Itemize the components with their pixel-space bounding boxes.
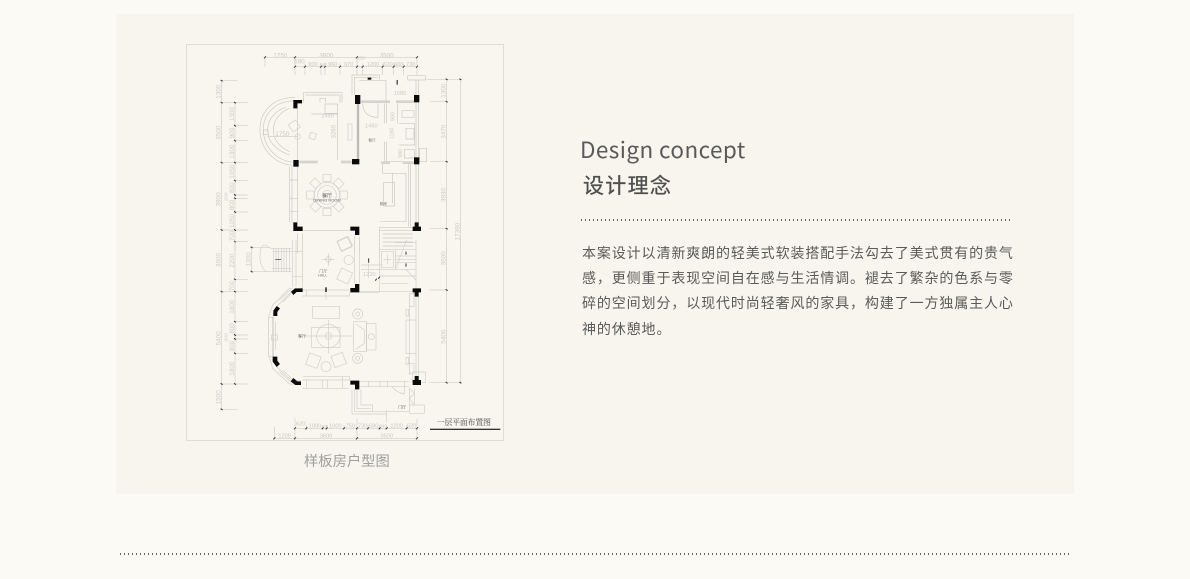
dimension lines: left: 1050	[229, 164, 236, 179]
foyer hall furniture: HALL	[318, 274, 327, 278]
dimension lines: top: 600	[394, 62, 403, 68]
panel: design concept background	[116, 14, 1074, 494]
dimension lines: left: 1050	[229, 213, 236, 228]
dimension lines: bottom	[273, 418, 418, 440]
dimension lines: bottom: 1000	[309, 423, 321, 429]
dimension lines: bottom: 3500	[380, 433, 393, 439]
dimension lines: left: 1300	[216, 84, 223, 99]
dimension lines: bottom: 3600	[320, 433, 332, 439]
dimension lines: lower right	[429, 241, 462, 383]
living room bay walls	[269, 288, 425, 394]
body paragraph: 本案设计以清新爽朗的轻美式软装搭配手法勾去了美式贯有的贵气	[582, 243, 1014, 263]
room labels upper: 1680	[394, 91, 406, 97]
dimension lines: lower left: 2200	[229, 253, 236, 268]
dimension lines: lower left: 1800	[229, 361, 236, 376]
dimension lines: top: 620	[383, 62, 393, 68]
dimension lines: left: 800	[229, 199, 236, 210]
dimension lines: top: 590	[294, 58, 305, 65]
dimension lines: left: 700	[229, 230, 236, 241]
dimension lines: left: 3900	[216, 192, 223, 206]
body paragraph	[582, 243, 1014, 339]
front porch: 门厅	[398, 403, 406, 409]
dimension lines: left: 1300	[229, 106, 236, 121]
dimension lines: right: 3470	[441, 124, 448, 139]
living room furniture: 客厅	[298, 332, 306, 338]
dimension lines: left: 900	[229, 127, 236, 138]
dimension lines: bottom: 620	[296, 422, 305, 428]
interior stair	[361, 240, 416, 292]
plan title	[430, 417, 500, 430]
dimension lines: bottom: 680	[369, 423, 378, 429]
dimension lines: lower left: 1500	[216, 390, 223, 404]
dimension lines: lower left	[216, 241, 269, 410]
dimension lines: right	[427, 79, 462, 251]
dimension lines: bottom: 1200	[278, 433, 291, 439]
upper half of floor plan	[216, 52, 462, 253]
dimension lines: top: 970	[344, 62, 353, 68]
dimension lines: top	[264, 52, 418, 75]
body paragraph: 碎的空间划分，以现代时尚轻奢风的家具，构建了一方独属主人心	[582, 293, 1014, 313]
dimension lines: top: 960	[328, 62, 337, 68]
dimension lines: bottom: 730	[358, 423, 367, 429]
room labels upper	[275, 91, 406, 206]
dimension lines: lower left: 1800	[229, 299, 236, 314]
room labels upper: 990	[390, 112, 396, 121]
dimension lines: top: 3500	[380, 52, 394, 59]
exterior entry stair	[260, 240, 303, 288]
dimension lines: bottom: 1200	[390, 423, 403, 429]
room labels upper: 3260	[331, 124, 337, 138]
dimension lines: left	[216, 80, 248, 251]
body paragraph: 神的休憩地。	[582, 319, 671, 339]
dimension lines: right: 17390	[454, 222, 461, 240]
dimension lines: top: 1200	[367, 62, 379, 68]
room labels upper: 厨房	[380, 201, 387, 206]
dimension lines: lower left: 3600	[216, 252, 223, 267]
dimension lines: lower left: 1300	[246, 252, 253, 266]
dimension lines: top: 3600	[319, 52, 334, 59]
room labels upper: 990	[398, 149, 404, 158]
structural columns lower	[273, 284, 421, 389]
dimension lines: bottom: 200	[321, 423, 329, 428]
body paragraph: 感，更侧重于表现空间自在感与生活情调。褪去了繁杂的色系与零	[582, 268, 1014, 288]
room labels upper: 2450	[321, 113, 334, 119]
dining table set: DINING ROOM	[313, 198, 341, 203]
plan title: 一层平面布置图	[437, 417, 491, 428]
bottom dotted divider	[120, 553, 1072, 555]
dimension lines: top: 450	[357, 55, 365, 61]
dimension lines: top: 900	[308, 62, 318, 68]
dimension lines: bottom: 1000	[329, 423, 342, 429]
living room furniture	[298, 306, 376, 372]
study furniture	[288, 120, 352, 140]
dimension lines: left: 200	[223, 192, 229, 201]
dimension lines: lower left: 200	[223, 333, 229, 341]
dimension lines: top: 1750	[273, 52, 288, 59]
dimension lines: left: 800	[229, 182, 236, 193]
dimension lines: lower right: 3600	[441, 251, 448, 265]
dimension lines: lower right: 5400	[441, 329, 448, 344]
structural columns upper	[293, 78, 421, 235]
foyer hall furniture	[318, 237, 359, 284]
dimension lines: left: 3500	[216, 125, 223, 140]
armchair near hall	[337, 236, 352, 252]
front porch	[352, 388, 424, 422]
heading divider dotted line	[581, 219, 1013, 221]
floor plan drawing	[186, 44, 504, 441]
room labels upper: 1750	[275, 131, 290, 138]
dimension lines: top: 140	[319, 62, 327, 67]
dimension lines: lower left: 700	[229, 280, 236, 291]
heading: english title: Design concept	[580, 133, 746, 165]
dimension lines: right: 3930	[441, 187, 448, 202]
dimension lines: lower left: 5400	[216, 331, 223, 345]
room labels upper: 餐厅	[368, 137, 376, 142]
dimension lines: right: 1300	[441, 83, 448, 98]
lower half of floor plan	[216, 237, 500, 440]
dining table set	[307, 174, 347, 216]
dimension lines: lower left: 800	[229, 323, 236, 334]
interior stair: 1220	[363, 272, 376, 278]
walls upper floor	[260, 75, 427, 253]
dimension lines: left: 1300	[229, 144, 236, 159]
dimension lines: bottom: 520	[407, 423, 416, 429]
dimension lines: bottom: 750	[346, 423, 355, 429]
floor plan caption: 样板房户型图	[304, 450, 390, 471]
dining table set: 餐厅	[322, 192, 332, 199]
heading: chinese title: 设计理念	[583, 170, 672, 200]
room labels upper: 1160	[389, 128, 395, 139]
dimension lines: top: 730	[406, 62, 415, 68]
foyer hall furniture: 门厅	[319, 268, 327, 274]
dimension lines: lower left: 800	[229, 340, 236, 351]
dimension lines: bottom: 340	[379, 423, 387, 428]
room labels upper: 1460	[365, 123, 378, 129]
